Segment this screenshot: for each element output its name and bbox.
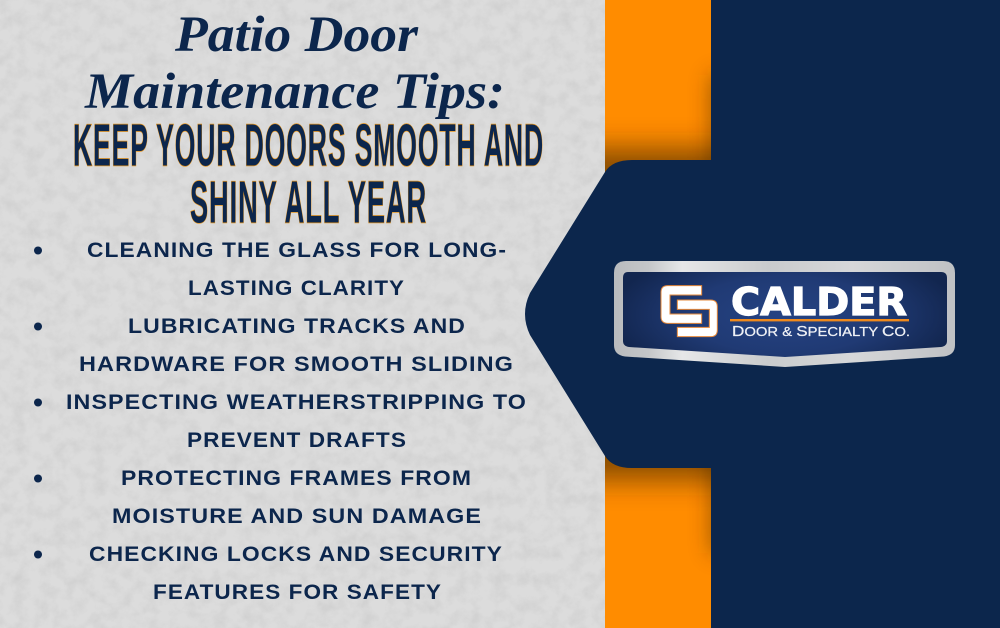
list item: lubricating tracks [34,314,514,376]
list item: lubricating tracks: LUBRICATING TRACKS AND [128,314,466,338]
list item: protecting frames [34,466,482,528]
subtitle [73,112,544,236]
panel: navy right side [711,0,1000,628]
logo: Calder Door & Specialty Co. badge [614,261,955,367]
subtitle: SHINY ALL YEAR [190,170,427,236]
bullet list [34,238,527,604]
list item: protecting frames: MOISTURE AND SUN DAMAGE [112,504,482,528]
list item: checking locks: FEATURES FOR SAFETY [153,580,442,604]
arrow: navy hexagon pointer [525,160,712,468]
title [84,7,505,120]
list item: checking locks [34,542,503,604]
logo: wordmark CALDER: CALDER [731,280,907,325]
list item: checking locks: CHECKING LOCKS AND SECURITY [89,542,503,566]
list item: inspecting weatherstripping: PREVENT DRAFTS [187,428,407,452]
logo: blue plate [623,272,947,357]
list item: cleaning the glass: CLEANING THE GLASS FOR LONG- [87,238,507,262]
list item: inspecting weatherstripping [34,390,527,452]
logo: orange rule [730,319,909,321]
icon: CS monogram [661,286,717,337]
list item: lubricating tracks: HARDWARE FOR SMOOTH SLIDING [79,352,514,376]
panel: textured grey background [0,0,605,628]
panel: orange stripe [605,0,711,628]
list item: cleaning the glass [34,238,507,300]
list item: inspecting weatherstripping: INSPECTING WEATHERSTRIPPING TO [66,390,527,414]
list item: protecting frames: PROTECTING FRAMES FROM [121,466,472,490]
title: Patio Door [174,7,419,63]
logo: silver frame [614,261,955,367]
list item: cleaning the glass: LASTING CLARITY [188,276,405,300]
logo: tagline: DOOR & SPECIALTY CO. [732,323,910,340]
title: Maintenance Tips: [84,64,505,120]
